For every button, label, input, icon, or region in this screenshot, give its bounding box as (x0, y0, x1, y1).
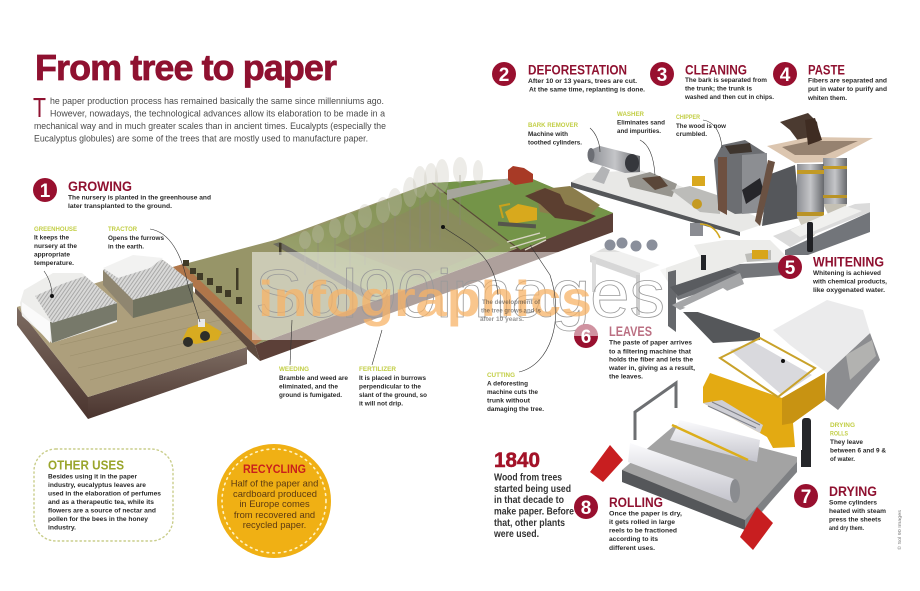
step 5: whitening: like oxygenated water. (813, 287, 885, 294)
step 6: leaves: 6 (581, 327, 591, 348)
panel: other uses: OTHER USES (48, 458, 124, 472)
panel: other uses: flowers are a source of nectar and (48, 508, 156, 514)
whitening tray (773, 203, 870, 255)
washer (627, 172, 677, 197)
callout: 1840: that, other plants (494, 518, 565, 529)
intro text: However, nowadays, the technological advances allow its elaboration to be made in a (50, 108, 386, 120)
label: tractor: TRACTOR (108, 226, 137, 233)
step 2: deforestation: DEFORESTATION (528, 62, 627, 78)
trees (299, 157, 483, 275)
step 8: rolling (574, 495, 682, 552)
label: cutting: machine cuts the (487, 389, 538, 396)
greenhouse right (103, 255, 193, 318)
callout: 1840: started being used (494, 484, 571, 495)
label: greenhouse: It keeps the (34, 234, 69, 242)
panel: recycling: from recovered and (234, 509, 315, 520)
step 4: paste: Fibers are separated and (808, 78, 887, 84)
step 4: paste: whiten them. (807, 95, 847, 102)
step 4: paste: PASTE (808, 62, 845, 78)
step 8: rolling: it gets rolled in large (609, 519, 675, 526)
step 1: growing: GROWING (68, 179, 132, 194)
leader lines (44, 120, 722, 372)
label: development (under watermark): The development of (482, 299, 541, 306)
step 6: leaves (574, 324, 695, 380)
callout: 1840: Wood from trees (494, 472, 562, 484)
step 8: rolling: according to its (609, 536, 658, 543)
label: washer: Eliminates sand (617, 120, 665, 126)
label: fertilizer: perpendicular to the (359, 384, 421, 390)
watermark: Sol90images (255, 256, 665, 332)
intro text: he paper production process has remained basically the same since millenniums ago. (50, 96, 384, 107)
label: weeding: WEEDING (279, 366, 309, 373)
yellow drying box (703, 338, 825, 448)
credit: © Sol 90 Images (896, 509, 902, 550)
label: washer: WASHER (617, 111, 644, 118)
intro text (33, 92, 386, 144)
step 5: whitening: with chemical products, (812, 278, 887, 286)
base of rolling section (622, 425, 797, 530)
callout: 1840: were used. (493, 529, 539, 540)
plate: long field (173, 157, 613, 361)
label: greenhouse: temperature. (34, 260, 74, 267)
illustration: factory line (571, 113, 880, 550)
worker (801, 418, 811, 467)
label: weeding: ground is fumigated. (279, 392, 342, 399)
label: fertilizer: It is placed in burrows (359, 375, 426, 382)
paper rolls (628, 420, 760, 503)
label: weeding (279, 366, 348, 399)
step 4: paste: put in water to purify and (808, 86, 887, 93)
step 7: drying: Some cylinders (829, 500, 877, 506)
step 5: whitening: WHITENING (813, 254, 884, 270)
step 1: growing: 1 (40, 181, 51, 202)
step 6: leaves: holds the fiber and lets the (609, 356, 693, 364)
yellow arm machine (690, 223, 720, 238)
step 3: cleaning: the trunk; the trunk is (685, 86, 752, 92)
step 3: cleaning (650, 62, 774, 101)
conveyor and hopper (755, 113, 873, 226)
step 7: drying: 7 (801, 487, 811, 508)
silos (797, 158, 847, 236)
panel: other uses: and as a therapeutic tea, while its (48, 499, 154, 506)
panel: recycling: in Europe comes (239, 498, 310, 509)
label: fertilizer (359, 366, 427, 408)
panel: other uses (34, 449, 173, 541)
step 8: rolling: Once the paper is dry, (609, 510, 682, 518)
label: drying rolls: ROLLS (830, 430, 849, 438)
plate: greenhouses and tractor (17, 255, 247, 419)
callout: 1840: make paper. Before (494, 506, 574, 518)
label: cutting (487, 372, 544, 413)
label: development (under watermark): the tree grows and is (481, 308, 541, 314)
step 2: deforestation (492, 62, 645, 94)
illustration: farmland plates (17, 157, 613, 419)
label: chipper: The wood is now (676, 123, 727, 130)
leader dots (50, 225, 445, 298)
step 8: rolling: different uses. (609, 545, 655, 552)
intro text: Eucalyptus globules) are some of the trees that are mostly used to manufacture paper. (34, 134, 368, 144)
label: fertilizer: slant of the ground, so (359, 392, 427, 399)
red reel units (590, 445, 773, 550)
step 2: deforestation: At the same time, replanting is done. (529, 86, 645, 94)
label: chipper: CHIPPER (676, 114, 700, 121)
step 5: whitening (778, 254, 887, 294)
panel: recycling: cardboard produced (233, 488, 317, 499)
label: drying rolls (830, 422, 886, 463)
step 4: paste (773, 62, 887, 102)
panel: recycling: RECYCLING (243, 464, 306, 476)
panel: other uses: used in the elaboration of perfumes (48, 490, 161, 498)
small yellow machine (671, 176, 720, 214)
label: development (under watermark) (480, 299, 541, 323)
panel: recycling: recycled paper. (243, 519, 306, 530)
step 6: leaves: the leaves. (609, 374, 643, 380)
log truck (447, 166, 533, 200)
panel: other uses: Besides using it in the paper (48, 474, 137, 480)
label: drying rolls: of water. (830, 456, 855, 463)
step 8: rolling: reels to be fractioned (609, 528, 677, 534)
label: drying rolls: DRYING (830, 422, 855, 429)
step 4: paste: 4 (780, 65, 791, 86)
label: drying rolls: between 6 and 9 & (830, 448, 886, 454)
step 8: rolling: ROLLING (609, 495, 663, 510)
excavator (498, 204, 537, 228)
step 7: drying: and dry them. (829, 525, 864, 532)
label: greenhouse (34, 226, 78, 267)
label: cutting: damaging the tree. (487, 406, 544, 413)
label: chipper (676, 114, 727, 138)
step 1: growing (33, 178, 211, 210)
label: drying rolls: They leave (830, 439, 863, 446)
label: weeding: Bramble and weed are (279, 375, 348, 382)
label: washer: and impurities. (617, 128, 661, 135)
panel: recycling (217, 444, 331, 558)
label: chipper: crumbled. (676, 131, 707, 138)
watermark: infographics (258, 271, 592, 327)
step 2: deforestation: After 10 or 13 years, trees are cut. (528, 78, 637, 85)
label: washer (617, 111, 665, 135)
label: greenhouse: appropriate (34, 252, 70, 258)
panel: other uses: industry. (48, 524, 76, 532)
gray support frame (635, 383, 676, 440)
label: weeding: eliminated, and the (279, 384, 338, 390)
label: tractor: in the earth. (108, 244, 144, 250)
step 2: deforestation: 2 (499, 65, 509, 86)
step 7: drying: heated with steam (829, 508, 886, 515)
label: fertilizer: it will not drip. (359, 400, 403, 408)
press section (668, 268, 780, 343)
step 6: leaves: The paste of paper arrives (609, 340, 692, 346)
step 6: leaves: to a filtering machine that (609, 348, 692, 356)
label: tractor (108, 226, 164, 250)
platform: bark remover to chipper (571, 170, 770, 236)
step 6: leaves: LEAVES (609, 324, 652, 339)
felled logs (507, 233, 546, 250)
step 5: whitening: 5 (785, 258, 796, 279)
step 3: cleaning: washed and then cut in chips. (684, 94, 774, 101)
black dot on rollers (781, 359, 785, 363)
label: greenhouse: GREENHOUSE (34, 226, 78, 233)
label: development (under watermark): after 10 years. (480, 316, 524, 323)
tractor (182, 319, 222, 347)
callout: 1840: 1840 (494, 449, 540, 472)
label: tractor: Opens the furrows (108, 235, 164, 242)
white roof dryer (773, 300, 880, 410)
label: bark remover: BARK REMOVER (528, 122, 578, 129)
step 7: drying: DRYING (829, 484, 877, 499)
greenhouse left (20, 273, 117, 343)
bark remover drum (588, 146, 640, 184)
label: bark remover (528, 122, 582, 146)
panel: other uses: industry, eucalyptus leaves are (48, 482, 146, 489)
label: greenhouse: nursery at the (34, 243, 77, 250)
chipper tower (714, 140, 767, 215)
step 8: rolling: 8 (581, 498, 591, 519)
step 1: growing: The nursery is planted in the greenhouse and (68, 194, 211, 202)
label: cutting: CUTTING (487, 372, 515, 379)
step 7: drying (794, 484, 886, 532)
label: fertilizer: FERTILIZER (359, 366, 396, 373)
step 7: drying: press the sheets (829, 516, 881, 524)
step 5: whitening: Whitening is achieved (813, 270, 881, 277)
step 3: cleaning: The bark is separated from (685, 77, 767, 84)
label: bark remover: Machine with (528, 131, 568, 138)
leaves table with tanks (590, 238, 660, 315)
callout: 1840 (493, 449, 574, 540)
row of plants (183, 243, 282, 304)
pile of logs (525, 188, 596, 222)
intro text: T (33, 92, 46, 123)
step 3: cleaning: 3 (657, 65, 667, 86)
label: cutting: A deforesting (487, 380, 528, 388)
step 1: growing: later transplanted to the ground. (68, 203, 172, 210)
whitening bath (660, 240, 785, 300)
intro text: mechanical way and in much greater scales than in ancient times. Eucalypts (especially the (34, 121, 386, 132)
label: bark remover: toothed cylinders. (528, 140, 582, 146)
step 3: cleaning: CLEANING (685, 62, 747, 78)
step 6: leaves: water in, giving as a result, (608, 365, 695, 372)
label: cutting: trunk without (487, 398, 531, 404)
callout: 1840: in that decade to (494, 495, 564, 506)
panel: recycling: Half of the paper and (231, 478, 318, 488)
panel: other uses: pollen for the bees in the honey (48, 516, 148, 523)
title: From tree to paper (35, 47, 337, 88)
worker (807, 222, 813, 252)
